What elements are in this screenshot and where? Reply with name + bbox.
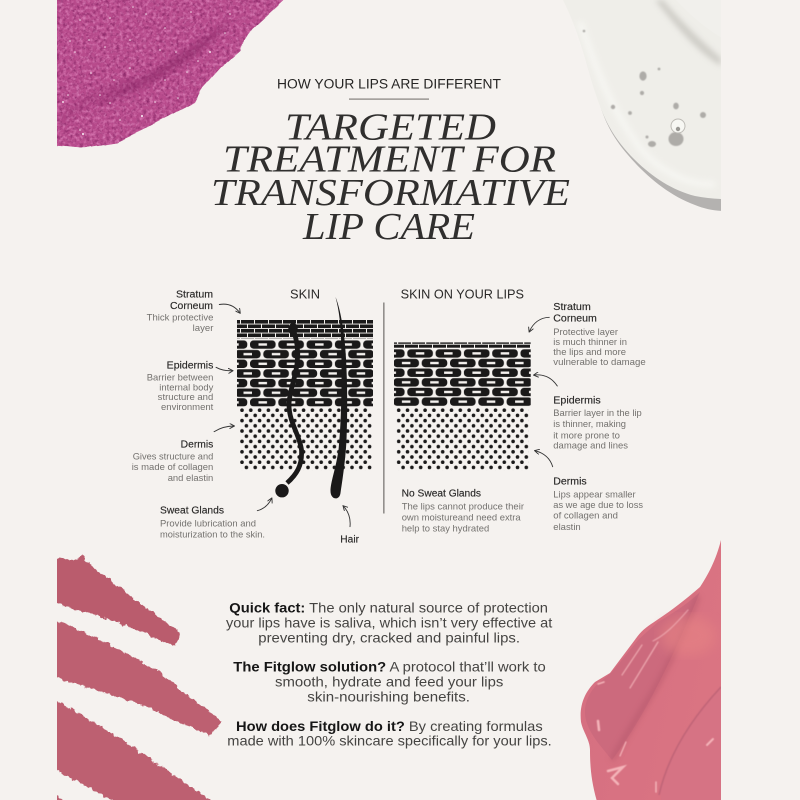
label: stratum corneum (lips): vulnerable to damage [553,357,646,368]
arrow: stratum corneum lips [529,317,549,332]
title: TARGETED [285,106,496,148]
label: epidermis (lips): Barrier layer in the lip [553,408,642,419]
label: stratum corneum (lips): is much thinner in [553,337,627,348]
label: no sweat glands: own moistureand need extra [402,513,521,524]
label: no sweat glands: help to stay hydrated [402,524,489,535]
label: epidermis (skin): Epidermis [167,360,213,371]
diagram: skin [237,287,373,498]
label: sweat glands [160,505,265,541]
label: epidermis (lips): is thinner, making [553,419,626,430]
text block: how does Fitglow do it: made with 100% skincare specifically for your lips. [227,733,552,749]
layer: lip dermis [397,408,529,470]
label: stratum corneum (skin) [147,290,213,334]
text block: quick fact: Quick fact: The only natural source of protection [229,599,548,615]
layer: epidermis [237,340,373,406]
label: dermis (skin): and elastin [168,473,213,484]
stroke 1 [50,555,180,646]
arrow: sweat glands [257,498,272,511]
divider [383,302,384,514]
label: stratum corneum (lips): Stratum [553,302,591,313]
label: epidermis (lips) [553,395,642,451]
title [211,106,570,248]
text block: quick fact: your lips have is saliva, which isn’t very effective at [226,614,552,630]
text block: quick fact [226,599,552,645]
text block: the Fitglow solution: The Fitglow solution? A protocol that’ll work to [233,659,546,675]
label: dermis (skin): Gives structure and [133,451,213,462]
stroke 2 [50,617,222,736]
text block: the Fitglow solution: smooth, hydrate and feed your lips [275,674,503,690]
swatch: clear gel [582,0,721,211]
label: epidermis (skin): internal body [159,383,214,394]
title: TREATMENT FOR [223,139,556,181]
header: eyebrow: HOW YOUR LIPS ARE DIFFERENT [277,76,501,92]
text block: how does Fitglow do it [227,718,552,749]
text block: how does Fitglow do it: How does Fitglow do it? By creating formulas [236,718,543,734]
arrow: hair [343,506,350,527]
label: no sweat glands: No Sweat Glands [402,489,481,500]
hair [330,297,347,498]
stroke 4 [57,795,63,800]
label: no sweat glands: The lips cannot produce their [402,501,524,512]
label: hair: Hair [340,534,360,545]
layer: thin epidermis [394,349,531,406]
swatch: pink lip gloss [581,540,725,800]
text block: the Fitglow solution [233,659,546,705]
heading: skin on your lips: SKIN ON YOUR LIPS [401,287,524,301]
label: no sweat glands [402,489,524,535]
label: epidermis (lips): damage and lines [553,440,628,451]
swatch: lip liner strokes [50,555,222,800]
layer: thin stratum corneum [394,342,531,348]
label: stratum corneum (lips) [553,302,646,368]
arrow: epidermis [216,367,233,371]
label: stratum corneum (lips): Protective layer [553,327,618,338]
label: dermis (skin): Dermis [181,440,213,451]
label: stratum corneum (skin): layer [193,323,213,334]
label: epidermis (lips): Epidermis [553,395,601,406]
label: dermis (lips): elastin [553,522,581,533]
title: LIP CARE [302,206,475,248]
sweat gland [275,323,302,497]
text block: quick fact: preventing dry, cracked and painful lips. [258,629,520,645]
title: TRANSFORMATIVE [211,172,570,214]
stroke 3 [57,701,210,800]
heading: skin: SKIN [290,287,320,301]
label: epidermis (skin): environment [161,402,214,413]
label: dermis (skin): is made of collagen [132,462,213,473]
label: dermis (lips): Lips appear smaller [553,489,636,500]
label: sweat glands: moisturization to the skin. [160,530,265,541]
arrow: epidermis lips [534,375,557,386]
label: stratum corneum (lips): Corneum [553,314,597,325]
swatch: magenta scrub [50,0,290,148]
label: epidermis (skin): structure and [158,392,213,403]
text block: the Fitglow solution: skin-nourishing benefits. [307,689,470,705]
label: dermis (lips): as we age due to loss [553,500,643,511]
label: stratum corneum (lips): the lips and more [553,347,626,358]
label: dermis (lips) [553,476,643,533]
arrow: stratum corneum [219,304,240,313]
label: dermis (lips): Dermis [553,476,587,487]
arrow: dermis [214,426,234,432]
arrow: dermis lips [535,451,553,467]
label: epidermis (skin) [147,360,214,413]
label: stratum corneum (skin): Thick protective [147,313,213,324]
layer: dermis [240,408,372,470]
label: dermis (lips): of collagen and [553,511,618,522]
label: sweat glands: Sweat Glands [160,505,224,516]
label: stratum corneum (skin): Corneum [170,301,213,312]
label: sweat glands: Provide lubrication and [160,519,256,530]
label: epidermis (lips): it more prone to [553,430,620,441]
label: dermis (skin) [132,440,213,484]
label: epidermis (skin): Barrier between [147,373,213,384]
layer: stratum corneum [237,320,373,338]
diagram: skin on your lips [394,287,531,470]
label: stratum corneum (skin): Stratum [176,290,213,301]
